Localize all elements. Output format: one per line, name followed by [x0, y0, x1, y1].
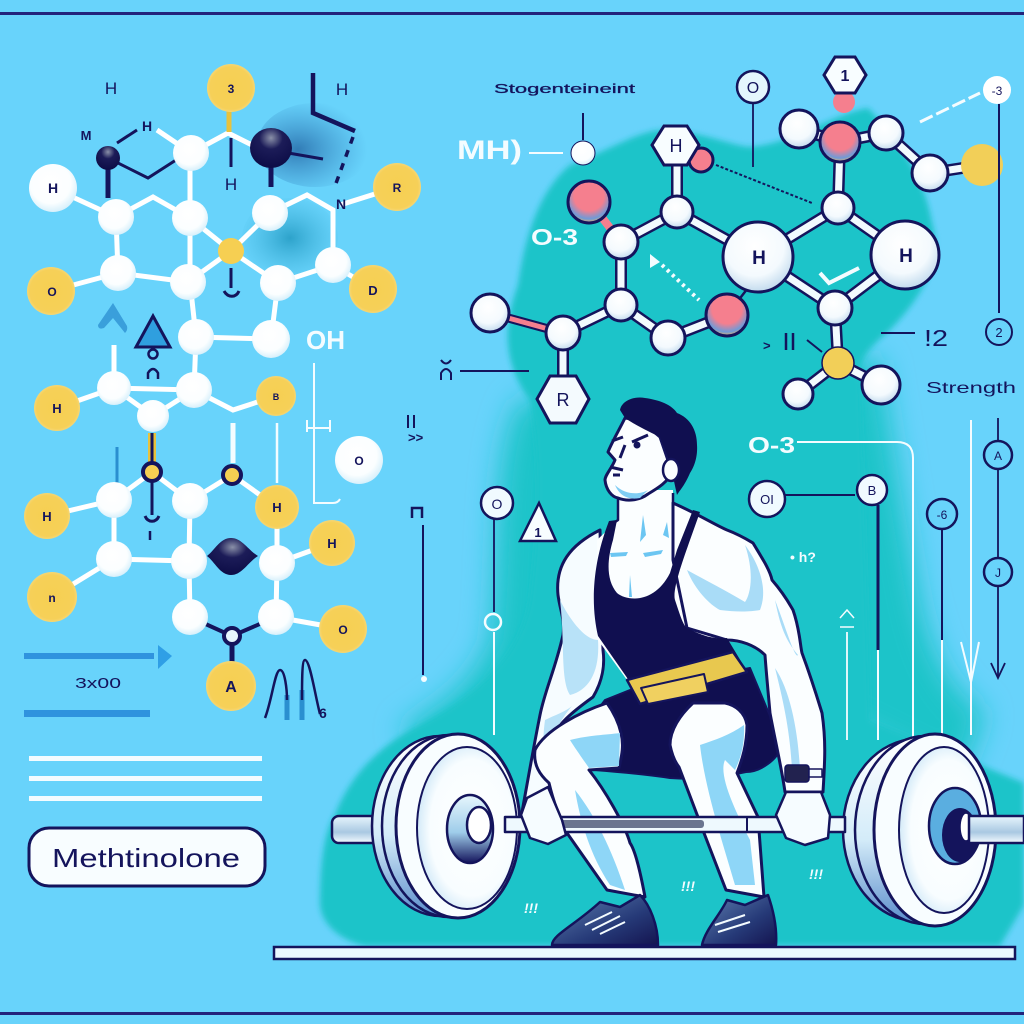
callout -6	[927, 499, 957, 735]
atom: black small	[96, 146, 120, 170]
right column callouts	[961, 418, 1012, 735]
atom: A yellow: A	[225, 679, 237, 696]
triangle 1	[520, 503, 556, 541]
atom: H yellow: H	[52, 401, 62, 416]
callout B	[857, 475, 887, 740]
hexagon R	[537, 376, 589, 423]
large atom H: H	[752, 248, 766, 269]
bracket	[307, 363, 340, 503]
atom: 3 yellow: 3	[228, 82, 235, 96]
atom: O yellow: O	[47, 285, 57, 299]
atom: small O	[335, 436, 383, 484]
right leg shading	[700, 725, 755, 885]
neck outlines	[608, 493, 690, 527]
callout O with leader	[481, 487, 513, 735]
callout OI	[749, 481, 855, 517]
left leg	[535, 703, 645, 897]
blue arrow and scale	[24, 645, 172, 717]
atom: H yellow right: H	[327, 536, 337, 551]
white atoms	[96, 482, 295, 635]
label: Strength: Strength	[926, 380, 1016, 397]
label: O-3 lower: O-3	[748, 432, 795, 458]
label: n leader	[441, 360, 529, 380]
teal background blob	[320, 108, 1024, 946]
top right callout: -3	[992, 84, 1003, 98]
callout OI: OI	[760, 492, 774, 507]
atom: D yellow	[349, 265, 397, 313]
hexagon 1	[824, 57, 866, 93]
face	[605, 418, 672, 500]
atom labels: H	[225, 175, 237, 194]
wristwatch	[785, 765, 822, 782]
atom labels: H	[336, 80, 348, 99]
check mark	[820, 268, 859, 283]
shorts	[590, 668, 782, 779]
atom: B yellow: B	[273, 392, 280, 402]
right molecule	[471, 57, 1003, 423]
ear	[663, 459, 679, 481]
arrow and triangle symbols	[98, 303, 170, 379]
shadow smudge dark	[257, 103, 373, 187]
large atom H right	[871, 221, 939, 289]
atom: H yellow left: H	[42, 509, 52, 524]
callout O with leader: O	[492, 496, 503, 512]
tick marks	[763, 333, 822, 353]
left arm	[522, 530, 604, 820]
atom: n yellow: n	[48, 591, 56, 605]
atom: H yellow right	[309, 520, 355, 566]
neck and chest shading	[610, 515, 669, 597]
weightlifter	[505, 398, 845, 945]
atom labels: M	[81, 128, 91, 143]
name badge: Methtinolone	[29, 828, 265, 886]
label: 1/2: !2	[924, 325, 948, 351]
atom: O yellow	[27, 267, 75, 315]
atom: H white	[29, 164, 77, 212]
label: O-3: O-3	[531, 224, 578, 250]
hexagon R: R	[556, 390, 570, 410]
atom: H yellow: H	[272, 500, 282, 515]
yellow atoms	[822, 144, 1003, 379]
atom labels: N	[336, 196, 346, 212]
spike chart	[265, 660, 327, 721]
marks near feet	[524, 866, 823, 916]
large atom H right: H	[899, 246, 913, 267]
label h?: • h?	[790, 549, 816, 565]
marks near feet: !!!	[681, 878, 695, 894]
top right callout	[920, 76, 1012, 345]
large atom H	[723, 222, 793, 292]
hexagon 1: 1	[841, 68, 850, 85]
left hand	[521, 787, 566, 844]
label: Stogenteineint: Stogenteineint	[494, 81, 636, 96]
label: 1/2	[881, 325, 948, 351]
pink oxygen atoms	[568, 91, 860, 336]
atom labels: H	[105, 79, 117, 98]
mid-left callouts	[408, 415, 427, 682]
circle label O: O	[747, 80, 759, 97]
mid-left callouts: >>	[408, 430, 424, 445]
atom: H yellow	[255, 485, 299, 529]
top right callout: 2	[995, 325, 1003, 340]
navy bonds	[108, 130, 323, 178]
dashed leader	[716, 165, 812, 203]
weight plates: left	[372, 734, 520, 918]
barbell left stub	[332, 816, 392, 843]
left arm shading	[543, 600, 598, 760]
torso	[597, 490, 735, 680]
label OH: OH	[306, 325, 345, 355]
name badge: Methtinolone: Methtinolone	[52, 843, 240, 873]
atom: B yellow	[256, 376, 296, 416]
atom: H yellow	[34, 385, 80, 431]
small up arrow	[840, 610, 854, 740]
spike chart: 6	[319, 705, 327, 721]
left molecule: upper	[27, 64, 421, 432]
label: O-3 lower	[748, 432, 913, 740]
navy bonds lower	[190, 617, 276, 636]
atom: A yellow	[206, 661, 256, 711]
white bonds	[47, 472, 343, 629]
shadow smudge teal	[242, 198, 338, 278]
atom: R yellow: R	[393, 181, 402, 195]
atom: black ellipse	[207, 538, 258, 575]
atom: O yellow: O	[338, 623, 348, 637]
atom: R yellow	[373, 163, 421, 211]
atom: black large	[250, 128, 292, 168]
right arm	[673, 503, 825, 792]
atom: D yellow: D	[368, 283, 378, 298]
jaw shade	[615, 485, 648, 499]
white dotted arrow	[650, 254, 699, 300]
left molecule: lower	[24, 423, 367, 711]
triangle 1: 1	[534, 525, 542, 540]
callout -6: -6	[937, 508, 948, 522]
tank top	[594, 510, 745, 682]
yellow and navy bond	[148, 433, 156, 466]
right hand	[776, 792, 830, 845]
hexagon H: H	[670, 136, 682, 156]
atom labels	[81, 79, 348, 212]
right column callouts: J	[995, 566, 1001, 580]
atom: H yellow left	[24, 493, 70, 539]
bonds	[563, 129, 982, 398]
atom: small O: O	[354, 454, 364, 468]
atom: O yellow	[319, 605, 367, 653]
white bonds	[51, 130, 397, 416]
facial features	[610, 435, 648, 475]
right column callouts: A	[994, 449, 1002, 463]
weight plates: right	[843, 734, 1024, 926]
yellow bond	[226, 105, 232, 132]
left leg shading	[570, 733, 625, 890]
white text lines	[29, 756, 262, 801]
marks near feet: !!!	[524, 900, 538, 916]
atom: H white: H	[48, 180, 58, 196]
right arm shading	[687, 545, 800, 770]
label: MHJ: MH)	[457, 135, 522, 165]
marks near feet: !!!	[809, 866, 823, 882]
ground	[274, 947, 1015, 959]
tick marks: >	[763, 338, 771, 353]
white atoms	[471, 110, 948, 409]
label: MHJ	[457, 113, 595, 165]
circle label O	[737, 71, 769, 167]
shoes	[552, 895, 776, 945]
head	[605, 398, 697, 500]
callout B: B	[868, 483, 876, 498]
white atoms	[97, 135, 351, 432]
right leg	[670, 703, 764, 897]
barbell bar	[505, 817, 845, 832]
hair	[620, 398, 697, 495]
atom: n yellow	[27, 572, 77, 622]
atom labels: H	[142, 118, 152, 134]
ring atoms	[143, 463, 241, 644]
blue arrow and scale: 3x00	[75, 675, 121, 692]
atom: 3 yellow	[207, 64, 255, 112]
hexagon H	[652, 126, 699, 165]
atom: small yellow	[218, 238, 244, 264]
belt	[627, 652, 747, 704]
